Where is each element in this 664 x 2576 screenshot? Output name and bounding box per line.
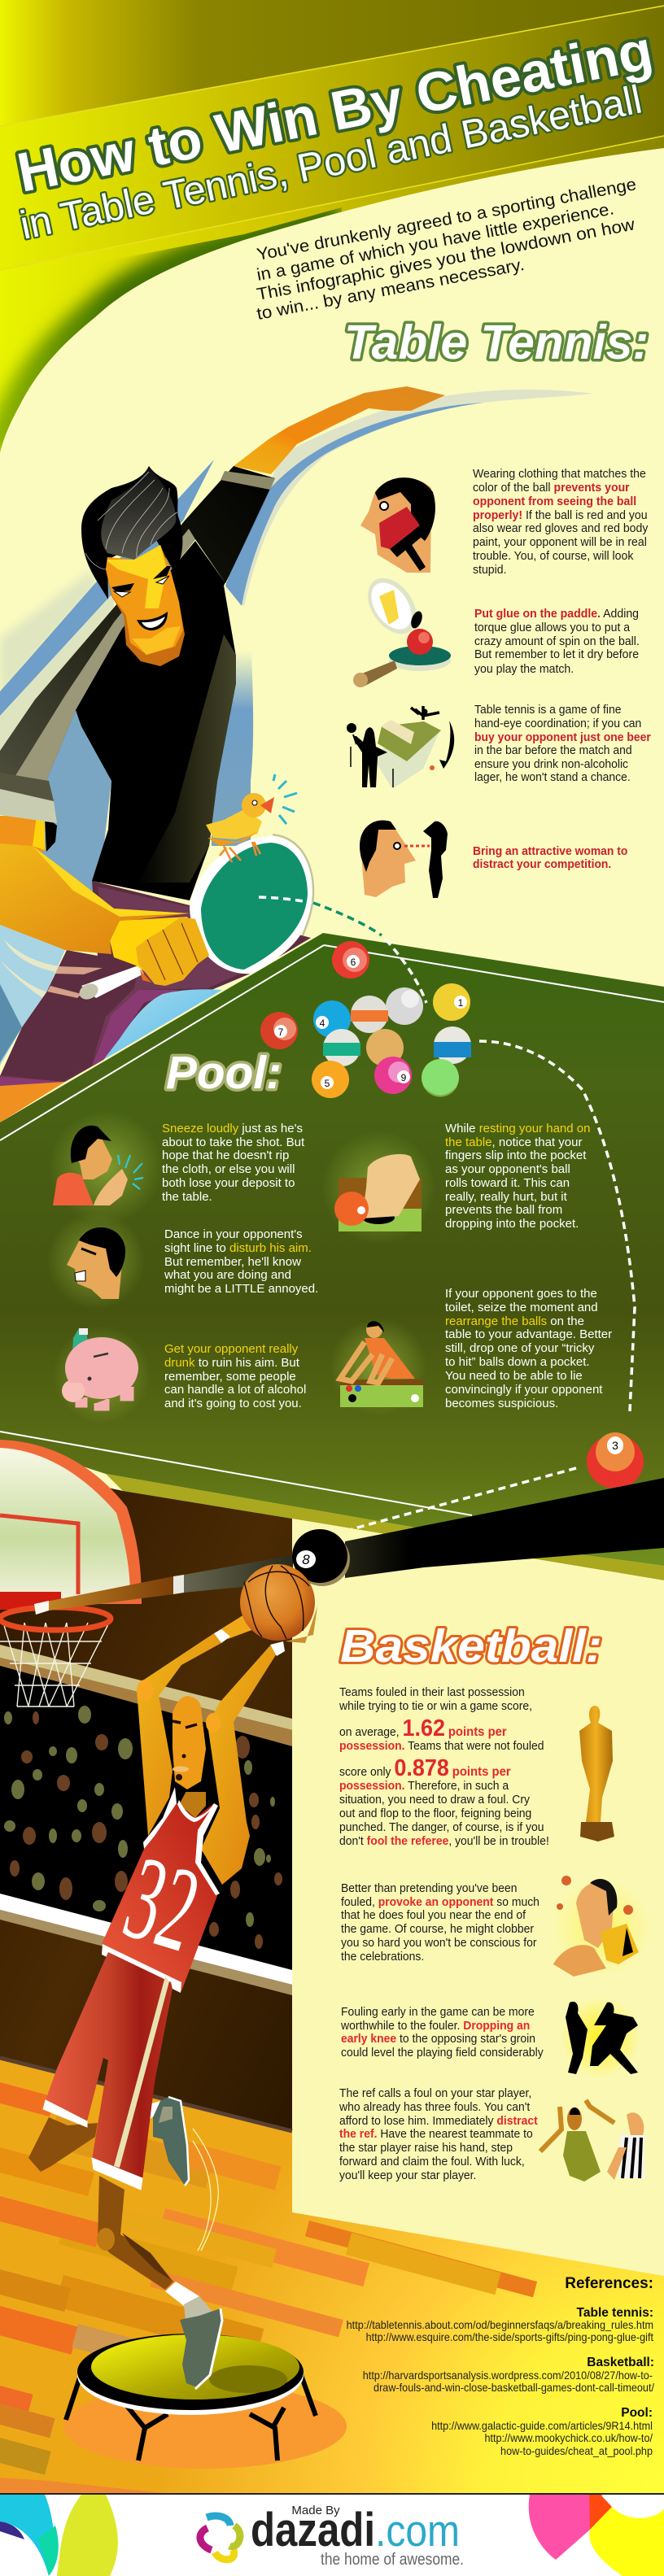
panel: gym wall	[0, 1464, 292, 2131]
text block: pool tip dance: sight line to disturb his aim.	[164, 1241, 312, 1255]
pool balls: 1	[458, 997, 464, 1009]
text block: pool tip drunk	[164, 1342, 306, 1410]
text block: pool tip sneeze: the table.	[162, 1190, 212, 1204]
text block: table tennis tip 2: Put glue on the paddle. Adding	[474, 608, 639, 621]
dashed ball paths	[259, 897, 635, 1529]
text block: pool tip sneeze: both lose your deposit to	[162, 1176, 295, 1190]
intro text: to win... by any means necessary.	[256, 255, 526, 324]
billiard cue with 8 ball	[34, 1478, 664, 1615]
pool balls: 9	[401, 1072, 407, 1083]
text block: basketball tip 4: The ref calls a foul on your star player,	[339, 2087, 531, 2100]
basketball hoop and backboard	[0, 1440, 142, 1706]
text block: basketball tip 2: fouled, provoke an opponent so much	[341, 1896, 540, 1909]
basketball player	[28, 1564, 317, 2290]
text block: references: Basketball:	[587, 2356, 654, 2369]
shoe on trampoline	[165, 2282, 222, 2389]
text block: table tennis tip 3: in the bar before the match and	[474, 744, 632, 757]
text block: table tennis tip 4: Bring an attractive woman to	[473, 845, 627, 858]
rear leg	[28, 2117, 98, 2172]
gripping hand	[110, 917, 209, 986]
text block: references: http://tabletennis.about.com/od/beginnersfaqs/a/breaking_rules.htm	[347, 2319, 653, 2331]
text block: table tennis tip 1	[473, 468, 649, 577]
text block: pool tip resting hand: the table, notice that your	[445, 1135, 582, 1149]
text block: basketball tip 3	[340, 2006, 544, 2059]
text block: pool tip resting hand: prevents the ball from	[445, 1203, 562, 1217]
pool balls	[260, 941, 471, 1098]
text block: references: http://www.esquire.com/the-side/sports-gifts/ping-pong-glue-gift	[366, 2331, 653, 2343]
text block: table tennis tip 1: properly! If the ball is red and you	[473, 509, 648, 522]
text block: basketball tip 1	[339, 1686, 549, 1848]
text block: table tennis tip 2: torque glue allows you to put a	[474, 621, 631, 634]
text block: pool tip rearrange: table to your advantage. Better	[445, 1327, 612, 1341]
icon: dazed man with trophy	[552, 1876, 653, 1978]
text block: table tennis tip 2: you play the match.	[474, 663, 574, 676]
player torso	[76, 480, 275, 900]
pelvis and shorts	[0, 881, 311, 1122]
text block: table tennis tip 3: buy your opponent just one beer	[474, 731, 651, 744]
panel: header banner	[0, 0, 664, 453]
text block: references: how-to-guides/cheat_at_pool.php	[500, 2445, 653, 2457]
text block: basketball tip 1: score only 0.878 points per	[339, 1754, 511, 1781]
text block: pool tip resting hand: as your opponent's ball	[445, 1162, 570, 1176]
text block: pool tip rearrange: toilet, seize the moment and	[445, 1301, 598, 1314]
bird on paddle	[206, 774, 297, 862]
text block: pool tip resting hand: fingers slip into the pocket	[445, 1149, 587, 1162]
torso folds	[138, 634, 236, 883]
text block: basketball tip 3: early knee to the opposing star's groin	[341, 2033, 535, 2046]
text block: basketball tip 1: on average, 1.62 points per	[339, 1715, 507, 1741]
player head	[81, 466, 185, 666]
icon: golden statue	[579, 1706, 614, 1842]
text block: basketball tip 3: could level the playing field considerably	[341, 2046, 544, 2059]
text block: pool tip resting hand	[445, 1122, 590, 1231]
text block: references: Pool:	[621, 2406, 653, 2420]
basketball	[240, 1564, 315, 1641]
text block: pool tip sneeze: the cloth, or else you will	[162, 1162, 295, 1176]
text block: pool tip dance: But remember, he'll know	[164, 1255, 301, 1269]
shorts	[43, 1952, 173, 2190]
text block: references	[347, 2275, 654, 2457]
intro text: in a game of which you have little experience.	[256, 199, 615, 285]
panel: pool table	[0, 933, 664, 1580]
text block: basketball tip 4: afford to lose him. Immediately distract	[339, 2115, 538, 2128]
heading: Table Tennis: Table Tennis:	[344, 316, 649, 369]
text block: pool tip rearrange: If your opponent goes to the	[445, 1287, 597, 1301]
trampoline	[63, 2334, 347, 2469]
text block: pool tip drunk: and it's going to cost you.	[164, 1397, 302, 1410]
text block: references: Table tennis:	[577, 2306, 653, 2320]
pool balls: 6	[351, 957, 356, 968]
text block: basketball tip 1: situation, you need to draw a foul. Cry	[339, 1794, 531, 1807]
footer colour shapes left	[0, 2495, 118, 2576]
Made By text: Made By	[291, 2504, 340, 2517]
text block: table tennis tip 4: distract your competition.	[473, 858, 611, 871]
title: How to Win By Cheating	[12, 19, 657, 204]
heading: Basketball: Basketball:	[340, 1620, 602, 1672]
text block: table tennis tip 1: trouble. You, of course, will look	[473, 550, 634, 563]
text block: pool tip rearrange: convincingly if your opponent	[445, 1383, 603, 1397]
text block: basketball tip 1: Teams fouled in their last possession	[339, 1686, 525, 1699]
text block: basketball tip 2	[341, 1882, 540, 1964]
text block: pool tip dance: what you are doing and	[164, 1268, 291, 1282]
intro text	[256, 175, 638, 324]
front leg	[97, 2176, 173, 2290]
text block: basketball tip 1: don't fool the referee, you'll be in trouble!	[339, 1835, 549, 1848]
text block: basketball tip 4: forward and claim the foul. With luck,	[339, 2155, 525, 2168]
text block: pool tip rearrange	[445, 1287, 612, 1410]
icon: table tennis silhouettes	[347, 706, 454, 789]
text block: basketball tip 1: possession. Teams that were not fouled	[339, 1740, 544, 1753]
text block: references: draw-fouls-and-win-close-basketball-games-dont-call-timeout/	[374, 2382, 654, 2394]
text block: table tennis tip 4	[473, 845, 627, 871]
text block: pool tip dance: might be a LITTLE annoyed.	[164, 1282, 318, 1296]
blue and light streaks beside arm	[0, 925, 65, 1066]
text block: pool tip sneeze: hope that he doesn't rip	[162, 1149, 289, 1162]
text block: references: http://www.galactic-guide.com/articles/9R14.html	[431, 2420, 653, 2432]
text block: pool tip drunk: Get your opponent really	[164, 1342, 299, 1356]
dazadi logo text: .com	[375, 2505, 460, 2556]
icon: man looking at woman silhouette	[360, 820, 448, 898]
bounce arcs	[193, 2129, 218, 2251]
dazadi logo text: dazadi	[251, 2504, 375, 2556]
head	[173, 1696, 206, 1818]
text block: table tennis tip 1: paint, your opponent will be in real	[473, 536, 647, 549]
hands on ball	[214, 1606, 317, 1656]
text block: table tennis tip 1: stupid.	[473, 564, 507, 577]
text block: references: http://www.mookychick.co.uk/how-to/	[484, 2432, 653, 2444]
text block: pool tip sneeze: Sneeze loudly just as he's	[162, 1122, 303, 1135]
player sleeve	[0, 466, 275, 781]
text block: table tennis tip 3: hand-eye coordination; if you can	[474, 717, 641, 730]
back shoe	[148, 2097, 189, 2186]
panel: footer	[0, 2493, 664, 2576]
title: in Table Tennis, Pool and Basketball	[16, 77, 645, 248]
icon: head with paint brush	[360, 477, 435, 573]
text block: basketball tip 1: possession. Therefore, in such a	[339, 1780, 509, 1793]
text block: basketball tip 3: worthwhile to the fouler. Dropping an	[340, 2020, 530, 2033]
text block: pool tip dance	[164, 1227, 318, 1296]
text block: basketball tip 1: punched. The danger, of course, is if you	[339, 1821, 544, 1834]
text block: pool tip resting hand: really, really hurt, but it	[445, 1190, 568, 1204]
text block: pool tip resting hand: dropping into the pocket.	[445, 1217, 579, 1231]
icon: fighting silhouettes	[560, 1997, 641, 2078]
text block: basketball tip 4: you'll keep your star player.	[339, 2169, 476, 2182]
illustration: table tennis player	[0, 386, 593, 1122]
text block: basketball tip 4: who already has three fouls. You can't	[339, 2101, 530, 2114]
icon: piggy bank with bottle	[62, 1328, 138, 1409]
panel: basketball cream background	[292, 1519, 664, 2276]
text block: basketball tip 4	[339, 2087, 538, 2182]
text block: references: References:	[565, 2275, 653, 2292]
text block: table tennis tip 3: Table tennis is a game of fine	[474, 704, 621, 717]
text block: table tennis tip 1: Wearing clothing that matches the	[473, 468, 646, 481]
text block: pool tip dance: Dance in your opponent's	[164, 1227, 303, 1241]
icon: glue bottle and paddle	[353, 569, 451, 687]
text block: pool tip rearrange: becomes suspicious.	[445, 1397, 558, 1410]
text block: table tennis tip 1: opponent from seeing the ball	[473, 495, 636, 508]
icon: player and referee	[540, 2100, 644, 2182]
text block: pool tip rearrange: You need to be able to lie	[445, 1369, 583, 1383]
intro text: You've drunkenly agreed to a sporting challenge	[256, 175, 638, 264]
icon: angry face	[67, 1227, 125, 1299]
pool balls: 5	[325, 1078, 330, 1089]
icon: sneezing man	[53, 1126, 143, 1205]
text block: pool tip sneeze	[162, 1122, 305, 1204]
text block: pool tip drunk: can handle a lot of alcohol	[164, 1383, 306, 1397]
logo mark	[200, 2516, 240, 2560]
pool balls: 4	[320, 1018, 325, 1029]
text block: table tennis tip 3: ensure you drink non-alcoholic	[474, 758, 628, 771]
pool ball 3	[587, 1432, 644, 1489]
text block: pool tip resting hand: rolls toward it. This can	[445, 1176, 570, 1190]
paddle handle	[76, 965, 144, 1002]
text block: basketball tip 2: that he does foul you near the end of	[341, 1909, 526, 1922]
text block: pool tip drunk: remember, some people	[164, 1370, 296, 1384]
icon: man arranging balls on table	[340, 1321, 423, 1407]
text block: pool tip rearrange: still, drop one of your “tricky	[445, 1341, 595, 1355]
arms	[137, 1633, 277, 1885]
text block: basketball tip 1: while trying to tie or win a game score,	[339, 1700, 532, 1713]
billiard cue with 8 ball: 8	[302, 1552, 310, 1567]
text block: basketball tip 2: the game. Of course, he might clobber	[341, 1923, 534, 1936]
footer colour shapes right	[529, 2495, 664, 2576]
icon: hand on pocket	[334, 1154, 422, 1231]
player raised arm with hand	[234, 386, 445, 474]
text block: pool tip rearrange: to hit” balls down a pocket.	[445, 1355, 590, 1369]
text block: basketball tip 1: out and flop to the floor, feigning being	[339, 1807, 531, 1820]
text block: pool tip resting hand: While resting your hand on	[445, 1122, 590, 1135]
text block: table tennis tip 1: also wear red gloves and red body	[473, 522, 649, 535]
text block: table tennis tip 3	[474, 704, 651, 784]
text block: basketball tip 2: the celebrations.	[341, 1951, 424, 1964]
paddle	[190, 835, 313, 974]
text block: references: http://harvardsportsanalysis.wordpress.com/2010/08/27/how-to-	[363, 2369, 653, 2382]
pool balls: 7	[278, 1026, 284, 1038]
text block: pool tip rearrange: rearrange the balls on the	[445, 1314, 584, 1328]
text block: basketball tip 4: the ref. Have the nearest teammate to	[339, 2128, 533, 2141]
heading: Pool: Pool:	[166, 1047, 282, 1099]
text block: table tennis tip 1: color of the ball prevents your	[473, 482, 630, 495]
text block: basketball tip 2: Better than pretending you've been	[341, 1882, 518, 1895]
jersey with number 32	[102, 1787, 220, 1993]
text block: basketball tip 4: the star player raise his hand, step	[339, 2142, 513, 2155]
swooshes behind player	[0, 390, 593, 899]
text block: table tennis tip 3: lager, he won't stand a chance.	[474, 771, 631, 784]
jersey with number 32: 32	[111, 1830, 213, 1977]
text block: basketball tip 2: you so hard you won't be conscious for	[341, 1937, 537, 1950]
text block: pool tip sneeze: about to take the shot. But	[162, 1135, 305, 1149]
pool ball 3: 3	[612, 1439, 618, 1452]
text block: table tennis tip 2: crazy amount of spin on the ball.	[474, 635, 640, 648]
intro text: This infographic gives you the lowdown on how	[256, 215, 637, 304]
text block: table tennis tip 2: But remember to let it dry before	[474, 648, 639, 661]
text block: pool tip drunk: drunk to ruin his aim. But	[164, 1356, 300, 1370]
text block: basketball tip 3: Fouling early in the game can be more	[341, 2006, 535, 2019]
crowd dots	[4, 1706, 282, 1949]
panel: gym floor	[0, 2058, 664, 2494]
tagline: the home of awesome.	[321, 2551, 464, 2569]
text block: table tennis tip 2	[474, 608, 640, 676]
front arm	[0, 773, 190, 954]
